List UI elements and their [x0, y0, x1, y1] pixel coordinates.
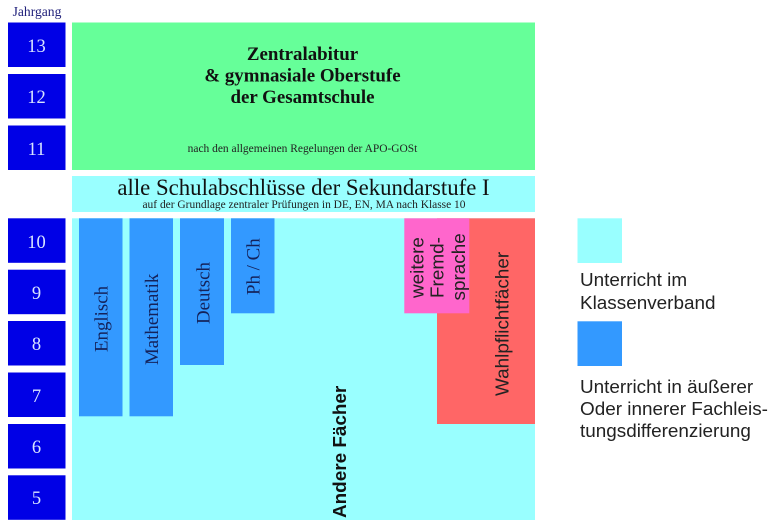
block: weitere Fremdsprache	[404, 218, 470, 313]
panel: Sekundarstufe I subjects	[72, 218, 535, 520]
panel: Zentralabitur: nach den allgemeinen Regelungen der APO-GOSt	[188, 143, 418, 155]
legend: Fachleistungsdifferenzierung: Oder innerer Fachleis-	[580, 399, 768, 420]
year column: grades 10 to 5: 10	[27, 233, 46, 253]
year column: grades 10 to 5: 9	[32, 284, 41, 304]
panel: Zentralabitur: Zentralabitur	[247, 44, 358, 65]
block: weitere Fremdsprache: Fremd-	[428, 237, 448, 298]
block: weitere Fremdsprache: weitere	[408, 237, 428, 299]
block: Wahlpflichtfächer: Wahlpflichtfächer	[492, 252, 514, 396]
bar: Englisch: Englisch	[92, 285, 112, 352]
panel: Schulabschlüsse: alle Schulabschlüsse der Sekundarstufe I	[117, 175, 490, 200]
year column: grades 10 to 5: 5	[32, 489, 41, 509]
year column: grades 10 to 5: 8	[32, 335, 41, 355]
year column: grades 13 to 11: 12	[27, 88, 46, 108]
legend: Fachleistungsdifferenzierung: tungsdifferenzierung	[580, 421, 751, 442]
bar: Englisch	[79, 218, 122, 416]
year column: grades 13 to 11: 11	[28, 140, 45, 160]
block: weitere Fremdsprache: sprache	[449, 233, 470, 300]
bar: Mathematik: Mathematik	[142, 273, 163, 365]
bar: Deutsch: Deutsch	[194, 262, 214, 324]
bar: Ph / Ch: Ph / Ch	[244, 238, 264, 295]
year column: grades 13 to 11: 13	[27, 37, 46, 57]
block: Wahlpflichtfächer	[437, 218, 535, 424]
panel: Zentralabitur: & gymnasiale Oberstufe	[204, 66, 401, 86]
legend: Klassenverband: Unterricht im	[580, 270, 687, 291]
year column: grades 10 to 5: 7	[32, 387, 41, 407]
panel: Zentralabitur	[72, 22, 535, 170]
panel: Schulabschlüsse	[72, 175, 535, 212]
heading: Jahrgang: Jahrgang	[13, 4, 62, 19]
bar: Ph / Ch	[231, 218, 274, 313]
bar: Deutsch	[180, 218, 224, 365]
panel: Zentralabitur: der Gesamtschule	[231, 87, 374, 108]
panel: Schulabschlüsse: auf der Grundlage zentraler Prüfungen in DE, EN, MA nach Klasse 10	[142, 199, 466, 211]
year column: grades 10 to 5: 6	[32, 438, 41, 458]
legend: Fachleistungsdifferenzierung: Unterricht in äußerer	[580, 377, 753, 398]
year column: grades 13 to 11	[8, 22, 66, 170]
label: Andere Fächer: Andere Fächer	[330, 385, 351, 518]
year column: grades 10 to 5	[8, 218, 66, 520]
legend: Klassenverband	[578, 218, 715, 314]
legend: Klassenverband: Klassenverband	[580, 293, 715, 314]
legend: Fachleistungsdifferenzierung	[578, 321, 768, 442]
bar: Mathematik	[130, 218, 173, 416]
